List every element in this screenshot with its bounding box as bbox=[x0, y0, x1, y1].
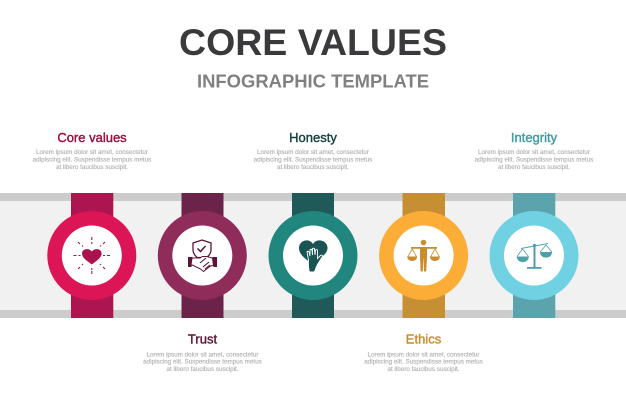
panel: honesty bbox=[254, 130, 372, 318]
strap: ethics bbox=[402, 193, 445, 318]
text block: ethics: adipiscing elit. Suspendisse tempus metus bbox=[364, 359, 483, 366]
heading: integrity: Integrity bbox=[511, 130, 558, 145]
text block: honesty: adipiscing elit. Suspendisse tempus metus bbox=[254, 157, 372, 164]
ring: trust bbox=[158, 211, 247, 300]
icon: heart and hand bbox=[299, 240, 328, 272]
panel: trust bbox=[143, 193, 262, 373]
text block: integrity: at libero faucibus suscipit. bbox=[498, 164, 570, 171]
text block: core values: Lorem ipsum dolor sit amet, consectetur bbox=[36, 149, 148, 156]
text block: trust: at libero faucibus suscipit. bbox=[166, 366, 239, 373]
text block: honesty: Lorem ipsum dolor sit amet, consectetur bbox=[257, 149, 369, 156]
heading: ethics: Ethics bbox=[406, 332, 442, 346]
panel: ethics bbox=[364, 193, 483, 373]
icon: figure with scales bbox=[407, 240, 440, 272]
text block: ethics: at libero faucibus suscipit. bbox=[387, 366, 460, 373]
heading: core values: Core values bbox=[57, 130, 127, 145]
ring: ethics bbox=[379, 211, 468, 300]
text block: core values: adipiscing elit. Suspendisse tempus metus bbox=[33, 157, 151, 164]
ring: core values bbox=[47, 211, 136, 300]
icon: radiant heart bbox=[74, 237, 110, 274]
text block: trust: adipiscing elit. Suspendisse tempus metus bbox=[143, 359, 262, 366]
panel: integrity bbox=[475, 130, 593, 318]
subtitle: INFOGRAPHIC TEMPLATE bbox=[197, 72, 429, 92]
text block: core values: at libero faucibus suscipit. bbox=[56, 164, 128, 171]
heading: trust: Trust bbox=[188, 332, 217, 346]
ring: honesty bbox=[268, 211, 358, 300]
text block: ethics: Lorem ipsum dolor sit amet, consectetur bbox=[368, 351, 480, 358]
text block: trust: Lorem ipsum dolor sit amet, consectetur bbox=[146, 351, 258, 358]
text block: integrity: Lorem ipsum dolor sit amet, consectetur bbox=[478, 149, 590, 156]
title: CORE VALUES bbox=[179, 21, 447, 63]
strap: integrity bbox=[513, 193, 555, 318]
text block: honesty: at libero faucibus suscipit. bbox=[277, 164, 349, 171]
text block: integrity: adipiscing elit. Suspendisse tempus metus bbox=[475, 157, 593, 164]
strap: trust bbox=[182, 193, 224, 318]
heading: honesty: Honesty bbox=[289, 130, 337, 145]
strap: honesty bbox=[292, 193, 334, 318]
icon: balance scale bbox=[517, 244, 552, 269]
ring: integrity bbox=[490, 211, 578, 300]
panel: core values bbox=[33, 130, 151, 318]
icon: shield and handshake bbox=[188, 240, 217, 272]
strap: core values bbox=[71, 193, 113, 318]
background band bbox=[0, 193, 626, 318]
